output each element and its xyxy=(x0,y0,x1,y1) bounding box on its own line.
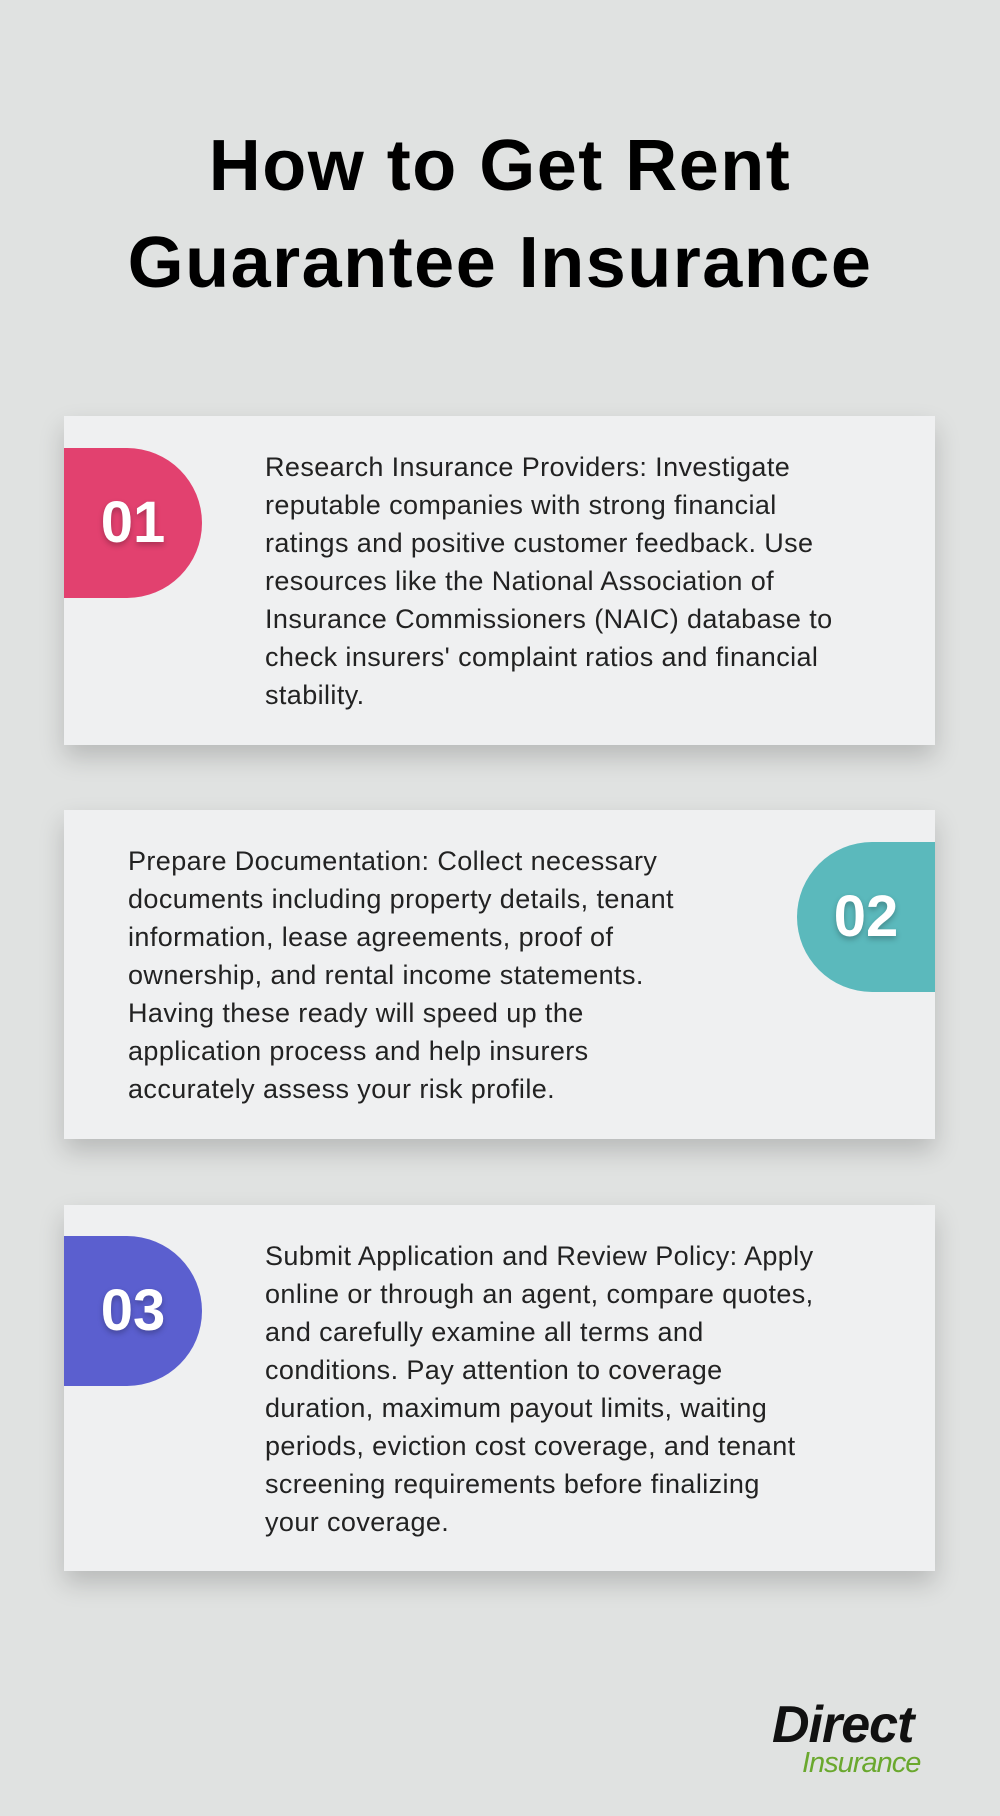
text: step 3: online or through an agent, compare quotes, xyxy=(265,1279,814,1309)
title: How to Get Rent xyxy=(209,126,791,206)
text: step 1: reputable companies with strong financial xyxy=(265,490,777,520)
text: step 3 xyxy=(265,1241,814,1537)
text: step 3: periods, eviction cost coverage, and tenant xyxy=(265,1431,796,1461)
title: Guarantee Insurance xyxy=(128,223,872,303)
logo: Insurance xyxy=(802,1747,920,1779)
text: step 1: Research Insurance Providers: Investigate xyxy=(265,452,790,482)
logo: Direct xyxy=(772,1696,913,1754)
badge 03: 03 xyxy=(101,1278,165,1343)
badge 02 xyxy=(797,842,935,992)
text: step 3: your coverage. xyxy=(265,1507,449,1537)
text: step 2 xyxy=(128,846,674,1104)
text: step 1: Insurance Commissioners (NAIC) database to xyxy=(265,604,833,634)
text: step 2: ownership, and rental income statements. xyxy=(128,960,644,990)
text: step 2: Having these ready will speed up the xyxy=(128,998,584,1028)
text: step 1 xyxy=(265,452,833,710)
text: step 1: resources like the National Association of xyxy=(265,566,774,596)
badge 02: 02 xyxy=(834,884,898,949)
text: step 2: documents including property details, tenant xyxy=(128,884,674,914)
text: step 2: Prepare Documentation: Collect necessary xyxy=(128,846,657,876)
text: step 3: Submit Application and Review Policy: Apply xyxy=(265,1241,814,1271)
panel: step 2 xyxy=(64,810,935,1139)
text: step 2: accurately assess your risk profile. xyxy=(128,1074,555,1104)
title xyxy=(128,126,872,303)
text: step 3: duration, maximum payout limits, waiting xyxy=(265,1393,767,1423)
logo xyxy=(772,1696,920,1779)
text: step 3: conditions. Pay attention to coverage xyxy=(265,1355,723,1385)
text: step 1: ratings and positive customer feedback. Use xyxy=(265,528,813,558)
text: step 1: check insurers' complaint ratios and financial xyxy=(265,642,818,672)
badge 01: 01 xyxy=(101,490,165,555)
text: step 2: information, lease agreements, proof of xyxy=(128,922,613,952)
badge 01 xyxy=(64,448,202,598)
panel: step 1 xyxy=(64,416,935,745)
text: step 1: stability. xyxy=(265,680,365,710)
text: step 3: screening requirements before finalizing xyxy=(265,1469,760,1499)
text: step 3: and carefully examine all terms and xyxy=(265,1317,704,1347)
panel: step 3 xyxy=(64,1205,935,1571)
badge 03 xyxy=(64,1236,202,1386)
text: step 2: application process and help insurers xyxy=(128,1036,589,1066)
